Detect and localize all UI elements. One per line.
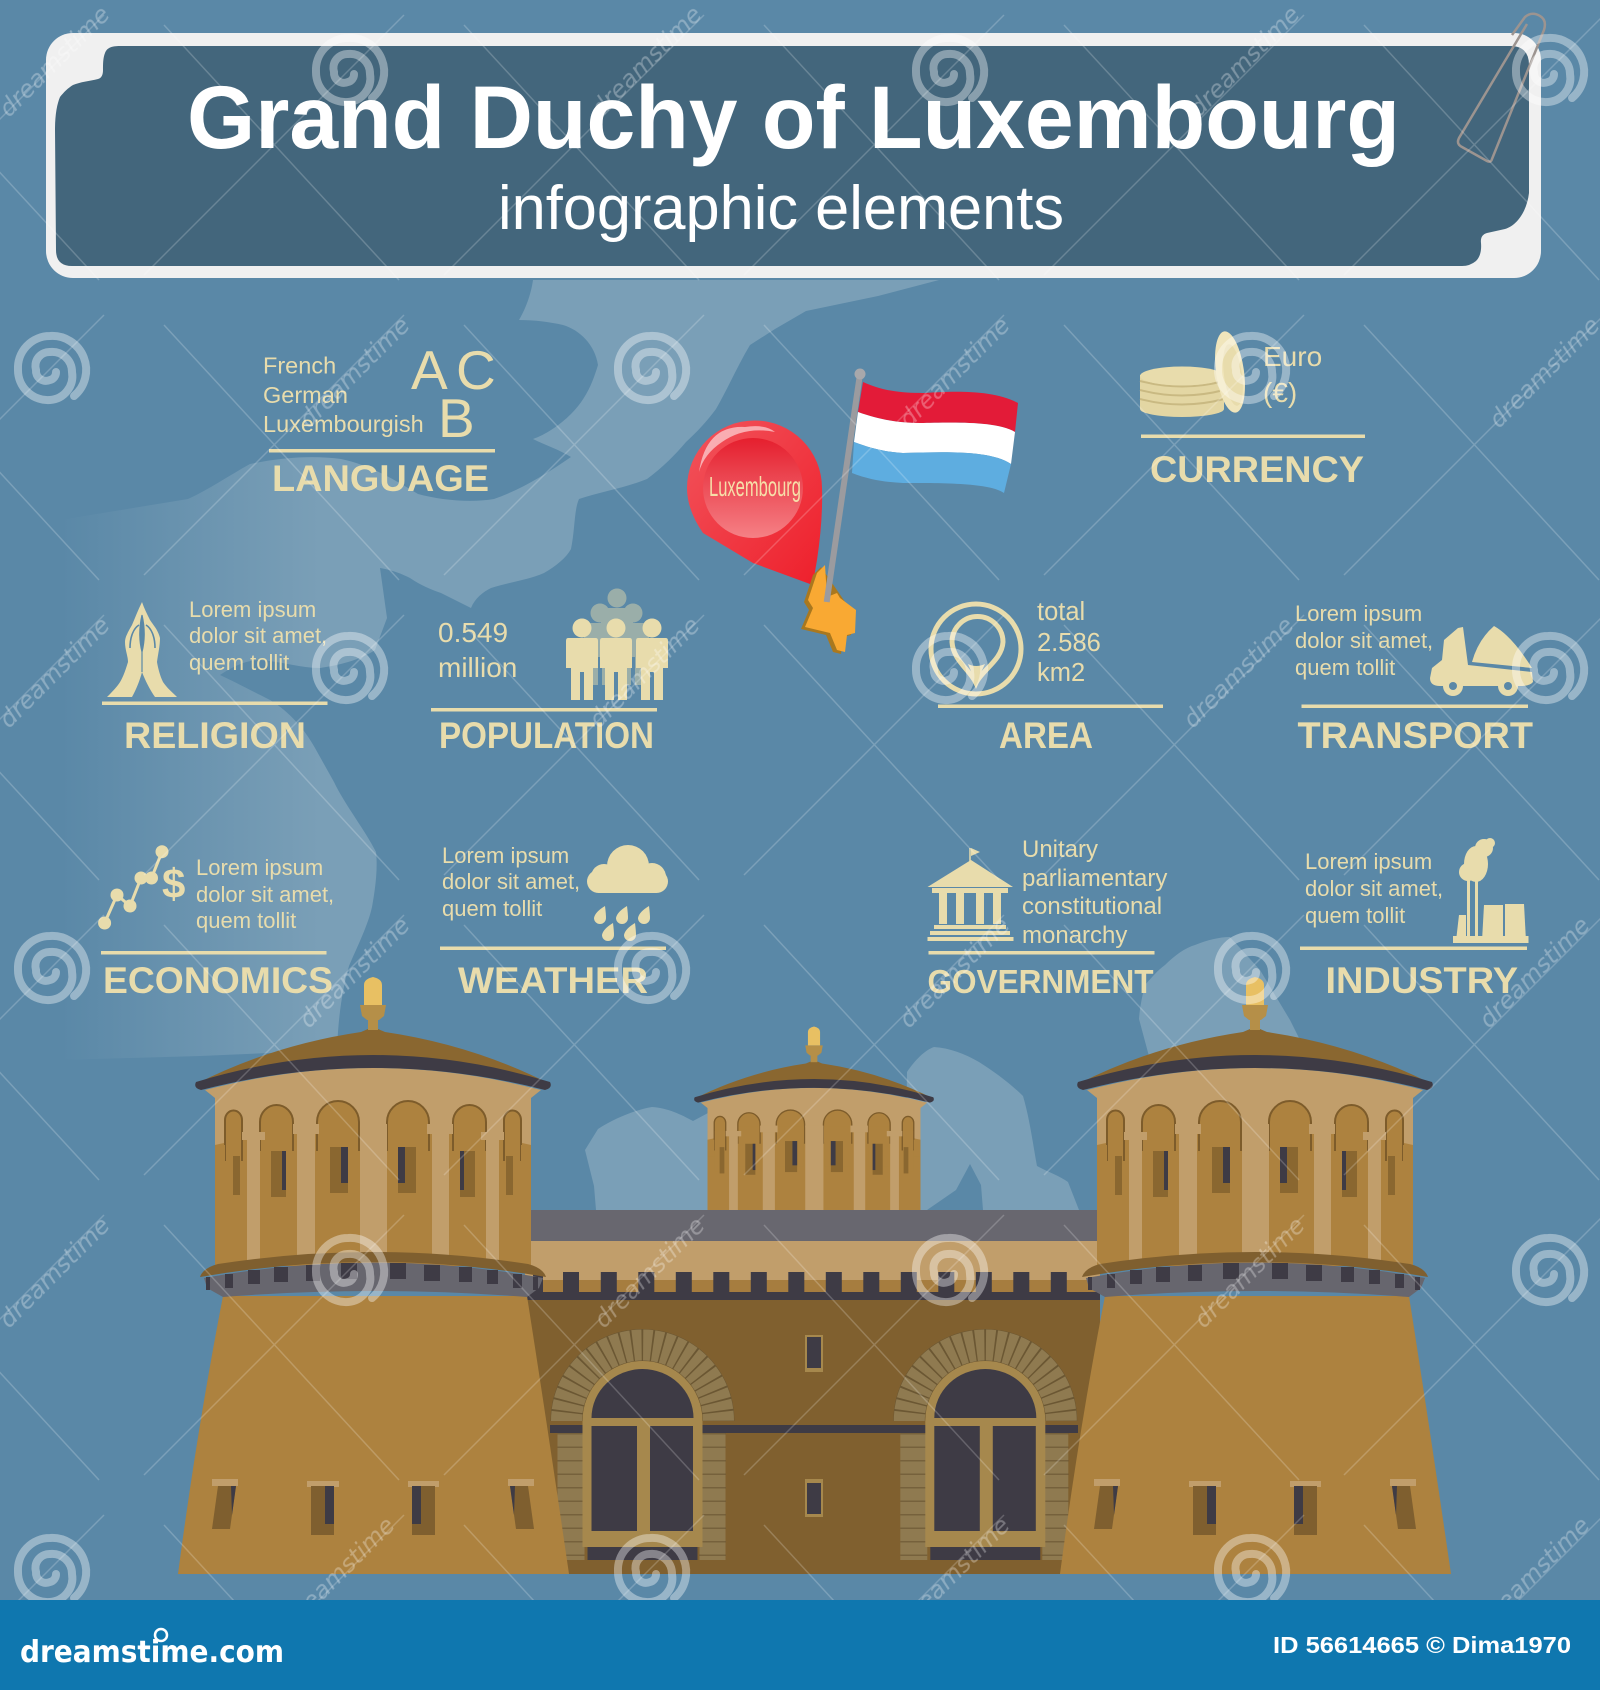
- castle: Drei Eechelen fortress: [178, 977, 1451, 1574]
- body text: quem tollit: [1305, 903, 1405, 928]
- panel: economics: [98, 845, 334, 1001]
- left arched door: [550, 1329, 734, 1560]
- body text: dolor sit amet,: [1305, 876, 1443, 901]
- wall roof: [525, 1210, 1100, 1242]
- area figure: total: [1037, 598, 1085, 626]
- body text: dolor sit amet,: [196, 882, 334, 907]
- icon: praying hands: [107, 602, 177, 697]
- text: dreamstime: [588, 1211, 710, 1333]
- panel: area: [931, 598, 1163, 756]
- population figure: [438, 617, 517, 683]
- body text: Lorem ipsum: [1305, 849, 1432, 874]
- area figure: 2.586: [1037, 629, 1101, 657]
- heading: ECONOMICS: [103, 960, 333, 1001]
- map: island centre left: [585, 1107, 708, 1210]
- text: dreamstime: [1473, 911, 1595, 1033]
- text: dreamstime: [1177, 611, 1299, 733]
- panel: industry: [1300, 838, 1528, 1001]
- pin label: Luxembourg: [709, 471, 801, 502]
- text: dreamstime: [1473, 1511, 1595, 1633]
- icon: letters A B C: [411, 339, 496, 449]
- body text: Lorem ipsum: [189, 597, 316, 622]
- text: dreamstime: [278, 1511, 400, 1633]
- string course: [550, 1425, 1078, 1433]
- flag: Luxembourg: [852, 382, 1018, 493]
- heading: TRANSPORT: [1298, 715, 1533, 756]
- body text: parliamentary: [1022, 865, 1167, 892]
- body text: Unitary: [1022, 836, 1098, 863]
- body text: constitutional: [1022, 893, 1162, 920]
- currency text: Euro: [1263, 341, 1322, 372]
- banner panel: [55, 46, 1529, 266]
- heading: LANGUAGE: [272, 458, 489, 499]
- language list: Luxembourgish: [263, 411, 424, 437]
- area figure: km2: [1037, 659, 1085, 687]
- icon: pin in circle: [931, 604, 1021, 694]
- footer logo: dreamstime.com: [20, 1635, 284, 1670]
- header banner: [46, 14, 1545, 278]
- text: dreamstime: [293, 911, 415, 1033]
- language list: [263, 352, 424, 437]
- body text: [189, 597, 327, 675]
- icon: factory with smoke: [1453, 838, 1528, 943]
- right arched door: [893, 1329, 1077, 1560]
- main wall: [525, 1300, 1100, 1574]
- body text: Lorem ipsum: [442, 843, 569, 868]
- text: dreamstime: [893, 311, 1015, 433]
- heading: POPULATION: [439, 715, 654, 756]
- text: dreamstime: [583, 611, 705, 733]
- body text: [196, 855, 334, 933]
- right tower: [1060, 977, 1451, 1574]
- subtitle: infographic elements: [498, 174, 1064, 243]
- heading: GOVERNMENT: [928, 963, 1154, 1000]
- body text: quem tollit: [442, 896, 542, 921]
- footer bar: [0, 1600, 1600, 1690]
- banner paper: [46, 33, 1541, 278]
- map: Luxembourg country shape: [801, 565, 856, 654]
- icon: growth chart and dollar: [98, 845, 185, 930]
- text: dreamstime: [893, 911, 1015, 1033]
- small wall window bottom: [805, 1479, 823, 1517]
- text: dreamstime: [1188, 1211, 1310, 1333]
- text: dreamstime: [585, 0, 707, 122]
- body text: quem tollit: [189, 650, 289, 675]
- centre tower: [694, 1026, 934, 1221]
- text: dreamstime: [893, 1511, 1015, 1633]
- population figure: 0.549: [438, 617, 508, 648]
- small wall window top: [805, 1335, 823, 1372]
- body text: dolor sit amet,: [1295, 628, 1433, 653]
- panel: government: [928, 836, 1167, 1000]
- map: western Europe silhouette left: [60, 280, 939, 1060]
- icon: letters A B C: A: [411, 339, 448, 401]
- language list: French: [263, 352, 336, 378]
- icon: paper clip: [1458, 14, 1545, 162]
- currency text: [1263, 341, 1322, 408]
- body text: [1305, 849, 1443, 928]
- panel: religion: [102, 597, 328, 756]
- wall parapet: [525, 1241, 1100, 1301]
- body text: [1295, 601, 1433, 680]
- population figure: million: [438, 652, 517, 683]
- heading: WEATHER: [458, 960, 648, 1001]
- icon: growth chart and dollar: $: [162, 860, 185, 907]
- body text: quem tollit: [1295, 655, 1395, 680]
- panel: currency: [1140, 329, 1365, 490]
- icon: letters A B C: C: [456, 339, 496, 401]
- body text: quem tollit: [196, 908, 296, 933]
- title: Grand Duchy of Luxembourg: [187, 67, 1400, 167]
- body text: dolor sit amet,: [442, 869, 580, 894]
- body text: Lorem ipsum: [196, 855, 323, 880]
- body text: [442, 843, 580, 921]
- panel: language: [263, 339, 496, 499]
- panel: transport: [1295, 601, 1533, 756]
- body text: dolor sit amet,: [189, 623, 327, 648]
- language list: German: [263, 382, 348, 408]
- panel: weather: [440, 843, 668, 1001]
- heading: CURRENCY: [1150, 449, 1364, 490]
- text: dreamstime: [293, 311, 415, 433]
- panel: population: [431, 588, 668, 756]
- heading: RELIGION: [124, 715, 306, 756]
- map: island right: [1139, 937, 1300, 1060]
- icon: government building: [928, 848, 1014, 941]
- map: island centre right: [905, 1047, 1079, 1210]
- body text: Lorem ipsum: [1295, 601, 1422, 626]
- body text: [1022, 836, 1167, 949]
- area figure: [1037, 598, 1101, 687]
- heading: INDUSTRY: [1326, 960, 1518, 1001]
- body text: monarchy: [1022, 922, 1127, 949]
- icon: dump truck: [1430, 626, 1533, 696]
- map pin: Luxembourg: [687, 420, 822, 585]
- heading: AREA: [999, 715, 1093, 756]
- footer image id: ID 56614665 © Dima1970: [1273, 1632, 1571, 1658]
- left tower: [178, 977, 569, 1574]
- icon: coins: [1140, 329, 1250, 417]
- text: dreamstime: [1183, 0, 1305, 122]
- icon: people: [566, 588, 668, 700]
- currency text: (€): [1263, 377, 1297, 408]
- flag pole: [827, 368, 866, 602]
- icon: letters A B C: B: [438, 387, 475, 449]
- icon: rain cloud: [587, 845, 668, 941]
